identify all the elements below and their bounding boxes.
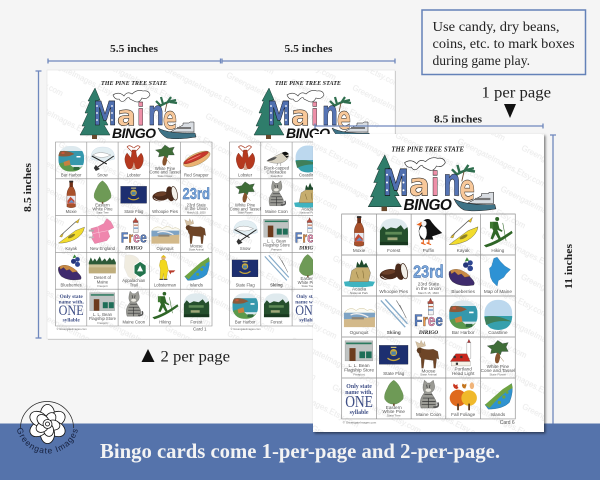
cell: Portland Head Light: Portland <box>455 366 472 371</box>
cell: L. L. Bean Flagship Store <box>89 293 117 325</box>
cell: L. L. Bean Flagship Store <box>344 341 374 377</box>
cell: Desert of Maine <box>89 256 116 288</box>
cell: Moxie: Moxie <box>353 248 366 253</box>
cell: Eastern White Pine: Eastern <box>301 276 316 281</box>
cell: Only state name with ONE syllable <box>295 294 321 324</box>
cell: White Pine Cone and Tassel <box>481 340 515 377</box>
cell: Eastern White Pine: White Pine <box>298 280 319 285</box>
cell: Ogunquit: Ogunquit <box>350 330 369 335</box>
logo: Maine Bingo large: n <box>443 161 461 206</box>
card 6 grid <box>342 214 515 426</box>
icon: flower <box>27 404 68 444</box>
cell: Forest: Forest <box>387 248 401 253</box>
cell: Forest <box>184 293 210 324</box>
card 1 footer <box>56 326 207 332</box>
cell: Islands <box>485 384 513 417</box>
cell: Blueberries: Blueberries <box>61 283 82 288</box>
cell: Map of Maine: Map of Maine <box>484 289 512 294</box>
cell: Free space <box>295 218 321 252</box>
cell: Puffin: Puffin <box>423 248 435 253</box>
cell: Eastern White Pine: White Pine <box>92 206 113 211</box>
cell: Moose: State Animal <box>189 247 204 251</box>
cell: Forest: Forest <box>271 319 283 324</box>
panel: 1-per-page sheet <box>313 134 544 432</box>
logo: Maine Bingo card 1: n <box>148 94 164 134</box>
dimension arrow: 5.5 inches left <box>48 58 220 64</box>
cell: Lobster: Lobster <box>238 172 253 177</box>
cell: L. L. Bean Flagship Store: Freeport <box>97 321 108 325</box>
card 6 footer: Card 6 <box>500 420 515 426</box>
cell: Kayak <box>58 219 84 251</box>
logo: Maine Bingo card 1 <box>80 80 196 141</box>
cell: Only state name with ONE syllable: name with, <box>295 299 321 305</box>
logo: Maine Bingo card 2: a <box>291 99 310 132</box>
cell: Coastline <box>484 300 512 335</box>
logo: Maine Bingo card 1: BINGO <box>112 125 156 141</box>
cell: White Pine Cone and Tassel: Cone and Tassel <box>149 170 181 174</box>
cell: Snow <box>234 221 258 251</box>
dimension label: 11 inches tall: 11 inches <box>563 243 575 289</box>
cell: State Flag: State Flag <box>383 371 405 376</box>
cell: Lobster <box>125 146 143 177</box>
caption: 1 per page <box>482 84 551 118</box>
bottom band <box>0 424 600 480</box>
logo: Maine Bingo card 2: BINGO <box>286 125 330 141</box>
cell: 23rd State: 23rd <box>413 261 444 281</box>
cell: Forest: Forest <box>190 319 203 324</box>
cell: Eastern White Pine <box>92 181 113 215</box>
cell: L. L. Bean Flagship Store: Freeport <box>353 373 365 377</box>
cell: Only state name with ONE syllable <box>345 384 373 416</box>
cell: Coastline: Coastline <box>299 172 317 177</box>
cell: Free space <box>414 298 443 336</box>
cell: L. L. Bean Flagship Store: Flagship Store <box>89 316 117 321</box>
cell: State Flag: State Flag <box>124 209 144 214</box>
cell: Moose: Moose <box>422 368 436 373</box>
cell: Skiing: Skiing <box>387 330 401 335</box>
cell: Free space: DIRIGO <box>298 247 317 252</box>
card 1 grid <box>56 142 212 332</box>
cell: White Pine Cone and Tassel: State Flower <box>238 211 253 215</box>
cell: Bar Harbor <box>232 293 258 324</box>
cell: Desert of Maine: Freeport <box>97 284 108 288</box>
cell: L. L. Bean Flagship Store: Flagship Store <box>263 243 291 248</box>
cell: State Flag <box>121 186 147 214</box>
dimension label: 5.5 inches right: 5.5 inches <box>284 43 333 55</box>
cell: State Flag <box>379 345 408 376</box>
cell: Islands: Islands <box>491 412 506 417</box>
cell: Coastline <box>296 146 321 177</box>
cell: Free space: Free <box>414 311 443 330</box>
cell: 23rd State: 23rd State <box>418 282 440 287</box>
cell: Hiking <box>484 217 513 253</box>
banner text: Bingo cards come 1-per-page and 2-per-page. <box>100 439 500 463</box>
caption: 2 per page: 2 per page <box>160 348 230 366</box>
cell: Desert of Maine: Maine <box>97 279 109 284</box>
logo: Maine Bingo card 1: e <box>163 99 177 137</box>
cell: Bar Harbor <box>58 146 84 177</box>
cell: Skiing <box>381 299 407 335</box>
cell: Lobsterman: Lobsterman <box>154 283 177 288</box>
cell: Forest <box>380 218 409 253</box>
cell: 23rd State: in the Union <box>185 206 208 211</box>
cell: Hiking: Hiking <box>159 319 172 324</box>
cell: Kayak <box>449 217 478 253</box>
dimension label: 5.5 inches left: 5.5 inches <box>110 43 159 55</box>
cell: Puffin <box>417 219 442 253</box>
cell: Black-capped Chickadee: State Bird <box>271 174 283 178</box>
cell: Acadia: National Park <box>300 211 316 215</box>
card 1 footer: Card 1 <box>193 326 207 332</box>
cell: Portland Head Light <box>450 339 475 376</box>
cell: Islands: Islands <box>190 283 203 288</box>
card 1 footer: © GreengateImages.com <box>56 327 87 331</box>
logo: Maine Bingo card 2: THE PINE TREE STATE <box>275 80 341 87</box>
cell: Lobster <box>236 146 255 177</box>
logo: Maine Bingo card 1: i <box>137 98 144 133</box>
cell: Maine Coon <box>416 380 441 417</box>
cell: Blueberries <box>449 257 476 294</box>
cell: L. L. Bean Flagship Store: L. L. Bean <box>267 238 287 243</box>
cell: White Pine Cone and Tassel: State Flower <box>489 373 506 377</box>
cell: Eastern White Pine: Eastern <box>386 405 402 410</box>
cell: Only state name with ONE syllable: ONE <box>345 392 373 411</box>
logo: Maine Bingo large <box>368 147 496 214</box>
logo: Maine Bingo card 2 <box>254 80 370 141</box>
cell: Only state name with ONE syllable: Only state <box>346 384 372 390</box>
cell: Moxie: Moxie <box>66 209 77 214</box>
cell: Appalachian Trail: Appalachian <box>122 278 146 283</box>
dimension arrow: 11 inches tall <box>550 135 556 424</box>
cell: Eastern White Pine: White Pine <box>383 409 405 414</box>
logo: Maine Bingo large: BINGO <box>404 197 452 214</box>
cell: Only state name with ONE syllable: syllable <box>63 318 80 324</box>
cell: 23rd State: March 15, 1820 <box>187 211 206 215</box>
cell: Moose <box>185 219 206 251</box>
cell: Free space: Free <box>121 230 147 247</box>
cell: Desert of Maine: Desert of <box>94 275 112 280</box>
cell: Acadia <box>344 259 375 295</box>
cell: Eastern White Pine: State Tree <box>387 414 401 418</box>
cell: Fall Foliage <box>450 382 477 417</box>
cell: White Pine Cone and Tassel: White Pine <box>235 203 256 208</box>
dimension label: 8.5 inches wide: 8.5 inches <box>434 114 483 126</box>
card 2 grid <box>230 142 386 331</box>
logo: Maine Bingo large: e <box>460 168 475 209</box>
logo: Maine Bingo card 2: i <box>311 98 318 133</box>
cell: Black-capped Chickadee <box>264 152 290 178</box>
cell: Only state name with ONE syllable: ONE <box>59 303 84 319</box>
cell: Kayak: Kayak <box>457 248 470 253</box>
cell: Only state name with ONE syllable: Only state <box>296 294 320 300</box>
card 2 copyright: © GreengateImages.com <box>230 327 261 331</box>
logo: Greengate Images <box>17 401 78 454</box>
cell: Only state name with ONE syllable: ONE <box>295 303 320 319</box>
cell: Appalachian Trail <box>122 255 146 288</box>
cell: Hiking <box>152 292 178 324</box>
cell: Eastern White Pine <box>383 380 405 418</box>
cell: L. L. Bean Flagship Store: Freeport <box>271 247 282 251</box>
cell: 23rd State: 23rd <box>182 186 210 203</box>
logo: Maine Bingo card 1: THE PINE TREE STATE <box>101 80 167 87</box>
logo: Maine Bingo large: i <box>431 165 439 204</box>
cell: Eastern White Pine: State Tree <box>96 211 109 215</box>
cell: Only state name with ONE syllable: name with, <box>59 299 84 305</box>
cell: L. L. Bean Flagship Store <box>263 219 291 251</box>
cell: Skiing <box>265 255 289 288</box>
cell: Eastern White Pine <box>298 254 319 288</box>
cell: White Pine Cone and Tassel <box>230 182 261 215</box>
cell: Bar Harbor: Bar Harbor <box>235 319 256 324</box>
callout box: coins, etc. to mark boxes <box>432 37 574 52</box>
cell: L. L. Bean Flagship Store: L. L. Bean <box>348 363 370 368</box>
cell: Moxie <box>353 216 366 253</box>
cell: 23rd State: 23rd State <box>187 202 207 207</box>
cell: Acadia: National Park <box>350 291 369 295</box>
cell: Eastern White Pine: Eastern <box>95 203 110 208</box>
cell: Red Snapper <box>181 148 212 177</box>
cell: White Pine Cone and Tassel: State Flower <box>158 174 173 178</box>
logo: Maine Bingo card 2: M <box>267 94 291 133</box>
cell: Maine Coon: Maine Coon <box>122 319 146 324</box>
cell: Blueberries: Blueberries <box>451 289 476 294</box>
cell: Portland Head Light: Head Light <box>452 371 475 376</box>
cell: State Flag: State Flag <box>236 283 255 288</box>
cell: Ogunquit: Ogunquit <box>157 246 174 251</box>
cell: Whoopie Pies <box>152 186 179 214</box>
cell: Maine Coon: Maine Coon <box>416 412 441 417</box>
logo: Maine Bingo large: THE PINE TREE STATE <box>391 147 464 154</box>
cell: Skiing: Skiing <box>270 283 283 288</box>
cell: L. L. Bean Flagship Store: L. L. Bean <box>93 312 113 317</box>
cell: White Pine Cone and Tassel: White Pine <box>487 364 510 369</box>
cell: Black-capped Chickadee: Chickadee <box>267 169 287 174</box>
logo: Maine Bingo large: M <box>383 162 409 205</box>
cell: White Pine Cone and Tassel: White Pine <box>155 166 176 171</box>
cell: Maine Coon: Maine Coon <box>265 209 288 214</box>
cell: 23rd State <box>182 186 210 215</box>
cell: Moxie <box>66 181 77 214</box>
cell: Black-capped Chickadee: Black-capped <box>264 166 290 170</box>
cell: Islands <box>185 257 210 288</box>
cell: Kayak: Kayak <box>65 246 78 251</box>
logo: Maine Bingo card 1: a <box>117 99 136 132</box>
cell: Whoopie Pies <box>379 263 409 294</box>
cell: Whoopie Pies: Whoopie Pies <box>152 209 178 214</box>
logo: Maine Bingo card 2: e <box>337 99 351 137</box>
cell: Moose: State Animal <box>420 373 437 377</box>
cell: Moose <box>416 340 439 377</box>
cell: Maine Coon <box>265 181 288 214</box>
cell: Forest <box>264 293 290 324</box>
callout box <box>422 10 586 74</box>
logo: Maine Bingo card 1: M <box>93 94 117 133</box>
cell: Lobsterman <box>154 255 177 288</box>
caption: 1 per page: 1 per page <box>482 84 551 102</box>
cell: Only state name with ONE syllable <box>59 294 84 324</box>
dimension label: 8.5 inches tall: 8.5 inches <box>22 162 34 212</box>
cell: Bar Harbor <box>449 300 478 335</box>
cell: Bar Harbor: Bar Harbor <box>452 330 475 335</box>
cell: White Pine Cone and Tassel: Cone and Tassel <box>230 206 261 211</box>
callout box: during game play. <box>432 54 530 69</box>
panel: 2-per-page sheet <box>47 70 396 340</box>
cell: Snow <box>91 147 115 177</box>
cell: Snow: Snow <box>240 246 251 251</box>
cell: 23rd State <box>413 261 444 295</box>
cell: Moose: Moose <box>190 243 203 248</box>
cell: Coastline: Coastline <box>488 330 508 335</box>
cell: Maine Coon <box>122 291 146 324</box>
cell: State Flag <box>232 260 258 288</box>
cell: Only state name with ONE syllable: syllable <box>299 318 317 324</box>
cell: 23rd State: in the Union <box>416 286 441 291</box>
cell: Eastern White Pine: State Tree <box>302 284 314 288</box>
cell: Lobster: Lobster <box>127 172 141 177</box>
cell: Appalachian Trail: Trail <box>130 283 138 288</box>
logo: Maine Bingo card 2: n <box>322 94 338 134</box>
cell: White Pine Cone and Tassel <box>149 145 181 178</box>
cell: Free space: Free <box>295 230 321 247</box>
dimension arrow: 5.5 inches right <box>222 58 395 64</box>
cell: Red Snapper: Red Snapper <box>184 172 209 177</box>
logo text: Greengate Images <box>17 428 78 454</box>
cell: Blueberries <box>58 254 82 288</box>
callout box: Use candy, dry beans, <box>432 20 560 35</box>
cell: Free space: DIRIGO <box>124 247 143 252</box>
cell: 23rd State: March 15, 1820 <box>418 291 439 295</box>
cell: Acadia <box>294 183 322 215</box>
cell: Acadia: Acadia <box>352 286 367 291</box>
cell: Only state name with ONE syllable: name with, <box>345 390 373 396</box>
cell: L. L. Bean Flagship Store: Flagship Store <box>344 368 374 373</box>
cell: New England <box>89 219 116 251</box>
cell: Snow: Snow <box>97 172 109 177</box>
cell: Acadia: Acadia <box>301 207 315 212</box>
dimension arrow: 8.5 inches wide <box>315 124 543 128</box>
cell: Map of Maine <box>484 257 512 294</box>
cell: Free space: DIRIGO <box>418 330 438 336</box>
cell: White Pine Cone and Tassel: Cone and Tassel <box>481 368 515 373</box>
cell: Fall Foliage: Fall Foliage <box>451 412 476 417</box>
cell: Only state name with ONE syllable: syllable <box>350 410 369 416</box>
card 6 footer <box>343 420 515 426</box>
cell: Hiking: Hiking <box>491 248 505 253</box>
card 6 footer: © GreengateImages.com <box>343 420 377 424</box>
cell: Ogunquit <box>151 227 179 251</box>
cell: New England: New England <box>90 246 116 251</box>
cell: Bar Harbor: Bar Harbor <box>61 172 82 177</box>
dimension arrow: 8.5 inches tall <box>36 71 42 338</box>
cell: Free space <box>121 218 147 252</box>
cell: Whoopie Pies: Whoopie Pies <box>379 289 409 294</box>
cell: Only state name with ONE syllable: Only state <box>60 294 83 300</box>
cell: Ogunquit <box>344 308 375 335</box>
logo: Maine Bingo large: a <box>409 168 430 204</box>
